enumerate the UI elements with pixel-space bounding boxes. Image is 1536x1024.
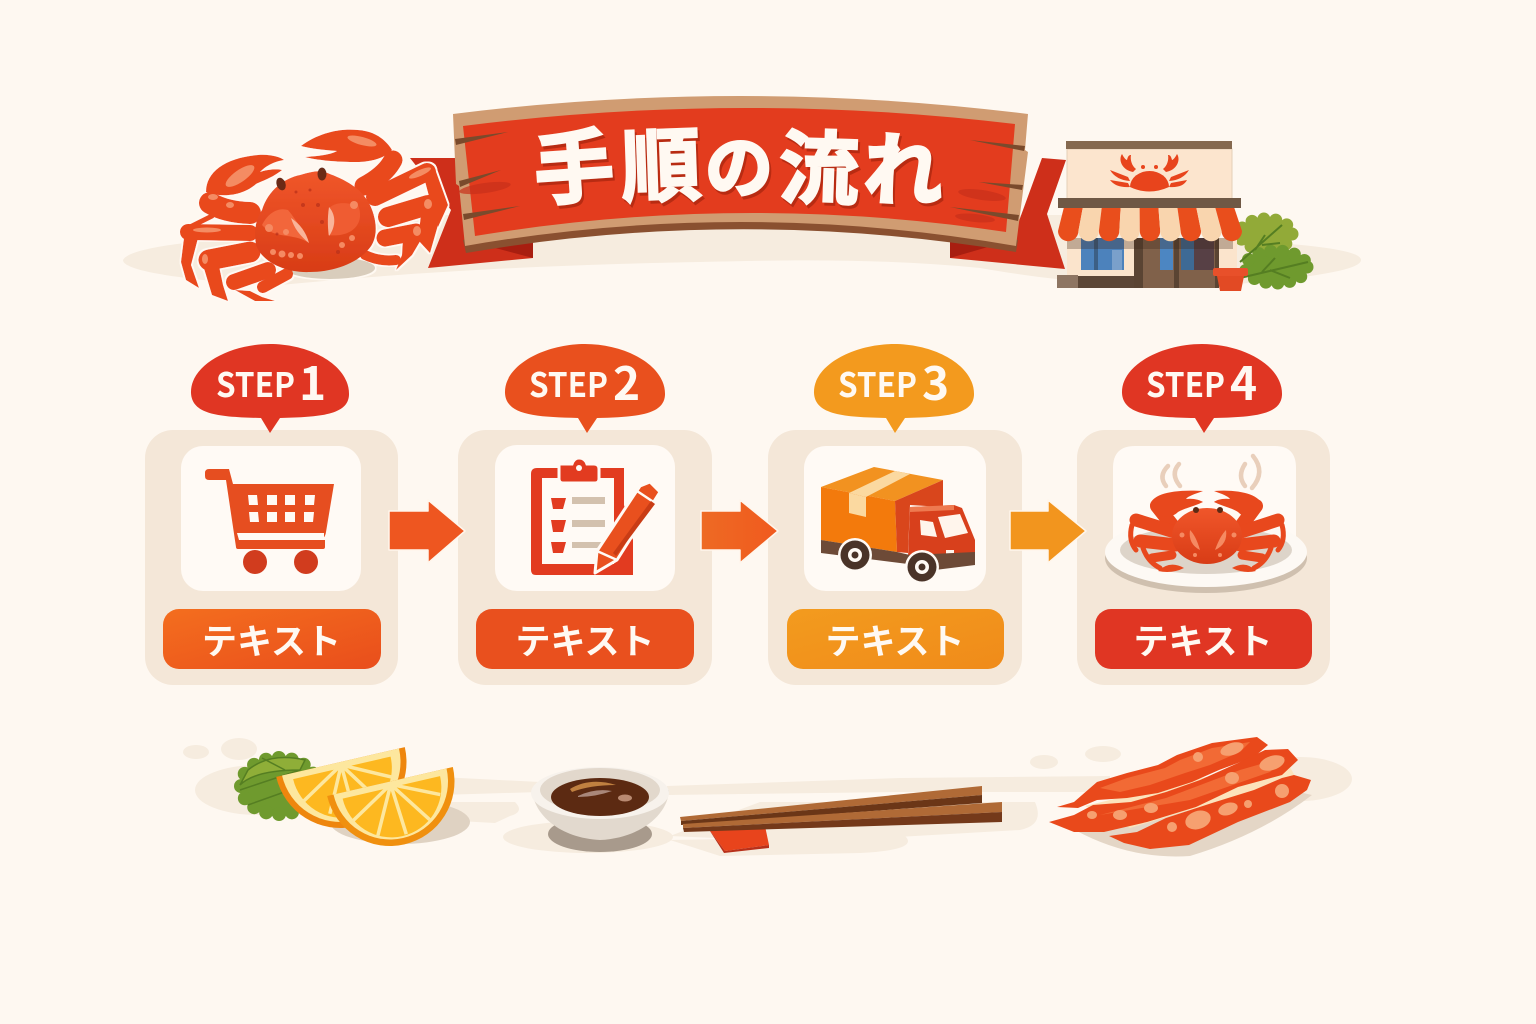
badge text: 3 (922, 348, 949, 414)
step 4 (1077, 344, 1330, 685)
label text: テキスト (516, 623, 654, 662)
step 2 (458, 344, 712, 685)
wooden board edge (463, 219, 1018, 253)
dish foot (548, 816, 652, 852)
icon: clipboard and pencil (531, 458, 660, 575)
awning shadow (1067, 238, 1233, 249)
step label (476, 609, 694, 669)
dish rim (531, 767, 669, 819)
footer background washes (183, 738, 1352, 856)
icon tile (495, 445, 675, 591)
step label (787, 609, 1004, 669)
icon tile (804, 446, 986, 591)
badge text: 2 (613, 348, 640, 414)
step 3 (768, 344, 1022, 685)
icon tile (181, 446, 361, 591)
window pane (1094, 238, 1122, 270)
step label (163, 609, 381, 669)
icon: crab legs (1049, 737, 1312, 856)
title: 流 (777, 124, 860, 216)
step badge (814, 344, 974, 433)
arrow 2 (701, 500, 778, 563)
upper chopstick (680, 786, 982, 821)
store base (1057, 275, 1078, 288)
cream meat (1085, 758, 1296, 828)
leg 3 (1109, 775, 1311, 849)
badge text: STEP (838, 358, 917, 407)
title banner (410, 96, 1066, 269)
parsley highlight (240, 758, 305, 805)
sauce highlights (570, 782, 632, 802)
card (458, 430, 712, 685)
icon: delivery truck (821, 467, 975, 584)
parsley veins (1240, 225, 1308, 278)
title: 順 (619, 121, 703, 213)
step 1 (145, 344, 398, 685)
title: の (705, 131, 773, 207)
lower chopstick (683, 802, 1002, 828)
card (1077, 430, 1330, 685)
icon: crab restaurant storefront (1057, 141, 1308, 291)
sauce (551, 778, 649, 816)
door block (1134, 238, 1219, 288)
leg 1 (1057, 737, 1268, 808)
title: れ (861, 125, 946, 218)
shelf bar (1058, 198, 1241, 208)
step badge (191, 344, 349, 433)
header ground shadow (123, 215, 1361, 287)
legs shadow (1075, 790, 1312, 856)
parsley leaf (241, 758, 317, 814)
sign crab logo (1110, 154, 1189, 192)
icon: steam (1162, 456, 1259, 488)
upper chopstick shade (681, 795, 982, 825)
doors (1143, 238, 1215, 288)
store wall (1067, 238, 1237, 278)
dish inner (540, 768, 660, 812)
window (1081, 238, 1124, 270)
citrus shadow (330, 800, 470, 844)
badge text: 4 (1230, 348, 1257, 414)
badge text: STEP (529, 358, 608, 407)
icon: shopping cart (205, 469, 334, 574)
parsley behind store (1240, 219, 1292, 249)
label text: テキスト (826, 623, 964, 662)
icon: citrus wedges with parsley (240, 747, 470, 859)
step label (1095, 609, 1312, 669)
step badge (505, 344, 665, 433)
arrow 1 (389, 500, 465, 563)
icon: soy sauce dish (531, 767, 669, 852)
wooden board (453, 96, 1028, 246)
card (768, 430, 1022, 685)
wood cracks (455, 132, 1025, 221)
ribbon folds (465, 240, 1012, 258)
plant pot (1213, 268, 1248, 291)
red sign face (463, 108, 1015, 236)
ribbon tail: right (950, 158, 1066, 269)
arrow 3 (1010, 500, 1086, 563)
parsley front leaf (1245, 251, 1307, 283)
badge text: STEP (216, 358, 295, 407)
dish body (532, 790, 669, 840)
back citrus wedge (276, 747, 420, 841)
badge text: 1 (299, 348, 326, 414)
chopstick rest (708, 826, 769, 853)
icon: chopsticks and rest (680, 786, 1002, 853)
sign streaks (459, 179, 1006, 224)
title: 手 (531, 122, 617, 216)
badge text: STEP (1146, 358, 1225, 407)
card (145, 430, 398, 685)
lower chopstick shade (683, 812, 1002, 832)
label text: テキスト (202, 623, 341, 662)
step badge (1122, 344, 1282, 433)
ribbon tail: left (410, 158, 533, 268)
label text: テキスト (1134, 623, 1272, 662)
store dark base (1078, 276, 1138, 288)
front citrus wedge (327, 767, 467, 859)
sign top bar (1066, 141, 1232, 149)
icon: plate (1105, 517, 1307, 593)
door glass (1160, 238, 1214, 270)
icon: cooked crab (1131, 491, 1283, 572)
icon: red crab (181, 130, 448, 301)
awning (1058, 207, 1242, 241)
icon tile (1113, 446, 1296, 545)
sign board (1067, 149, 1232, 199)
leg 2 (1049, 749, 1298, 832)
